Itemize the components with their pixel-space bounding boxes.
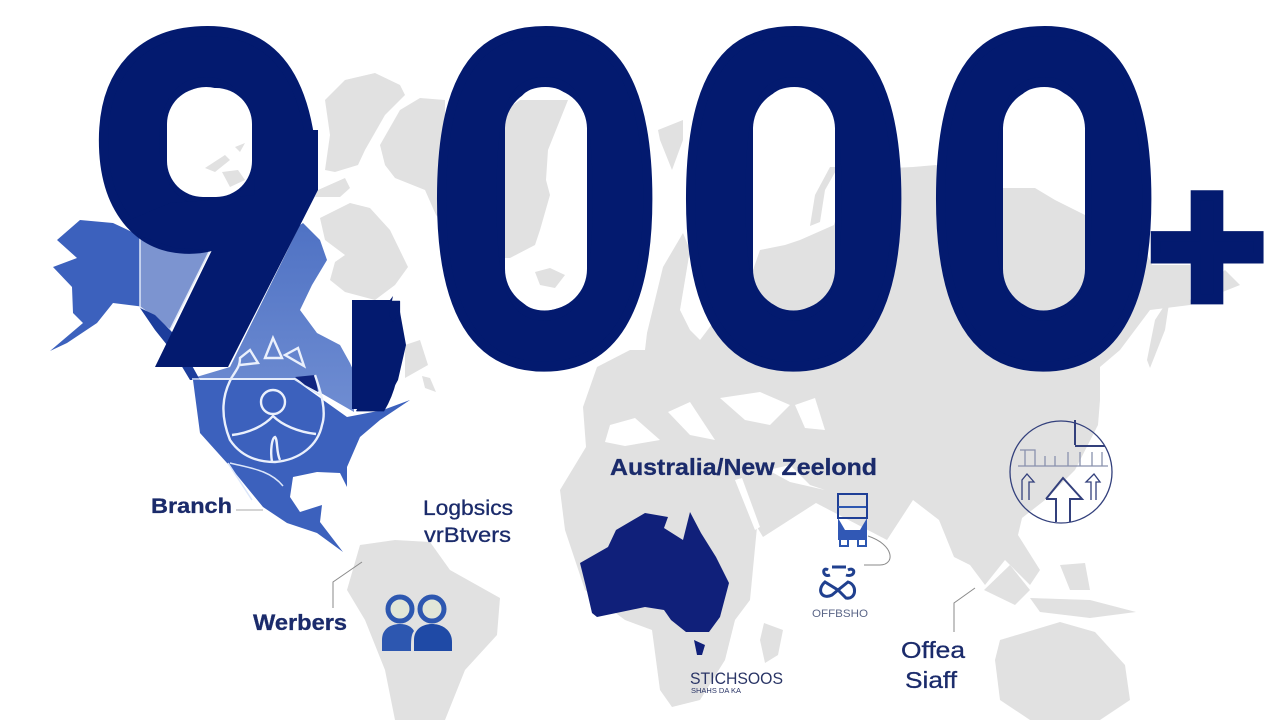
digit 9 bbox=[98, 26, 318, 367]
office staff label bbox=[901, 588, 975, 693]
icon: circle with arrows bbox=[1010, 420, 1112, 523]
emblem bbox=[223, 338, 324, 462]
stichsoos caption: STICHSOOS bbox=[690, 669, 783, 688]
office staff label: Siaff bbox=[905, 667, 958, 693]
stichsoos caption: SHAHS DA KA bbox=[691, 688, 741, 695]
plus sign: + bbox=[1147, 130, 1267, 360]
navy lake bbox=[295, 375, 318, 392]
branch label bbox=[151, 495, 263, 518]
border line bbox=[192, 379, 320, 500]
icon: knot bbox=[821, 567, 855, 598]
yukon panel bbox=[140, 236, 210, 330]
office staff label: Offea bbox=[901, 637, 965, 663]
world map background bbox=[205, 73, 1240, 720]
australia map bbox=[580, 512, 729, 655]
branch label: Branch bbox=[151, 495, 232, 518]
small icon caption: OFFBSHO bbox=[812, 608, 868, 620]
canada bbox=[193, 223, 354, 412]
map sea cut-outs bbox=[605, 392, 825, 530]
australia/new zealand heading: Australia/New Zeelond bbox=[610, 454, 877, 480]
logistics label: vrBtvers bbox=[424, 524, 511, 547]
workers label: Werbers bbox=[253, 610, 347, 635]
stichsoos caption bbox=[690, 669, 783, 695]
icon: truck bbox=[838, 494, 890, 565]
north america map bbox=[50, 220, 410, 552]
logistics label bbox=[423, 497, 513, 547]
united states and mexico bbox=[193, 380, 410, 552]
workers label bbox=[253, 562, 362, 635]
logistics label: Logbsics bbox=[423, 497, 513, 520]
comma: , bbox=[336, 30, 420, 432]
icon: people bbox=[382, 597, 452, 651]
alaska bbox=[50, 220, 145, 351]
panhandle bbox=[140, 308, 200, 380]
big number bbox=[98, 26, 1264, 412]
